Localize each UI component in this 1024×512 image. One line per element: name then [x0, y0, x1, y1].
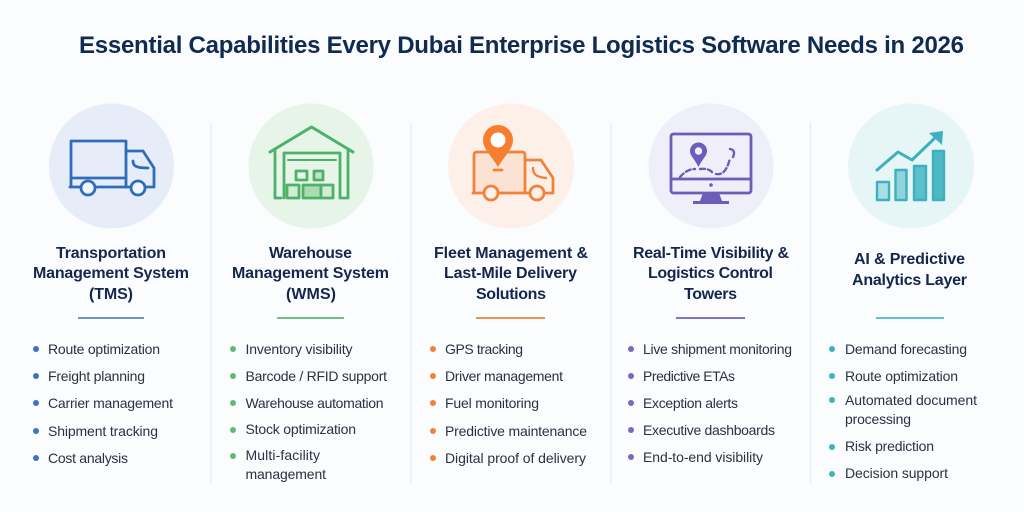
heading: Fleet Management & — [434, 245, 588, 262]
bullet list: GPS tracking — [445, 341, 523, 357]
heading — [633, 245, 789, 303]
bullet list: Warehouse automation — [246, 395, 384, 411]
bullet list: Exception alerts — [643, 395, 738, 411]
bullet list: Freight planning — [48, 368, 145, 384]
heading — [852, 251, 967, 289]
bullet list: Demand forecasting — [845, 341, 967, 357]
location pin — [483, 125, 513, 167]
bullet list — [829, 341, 977, 481]
bullet list: Barcode / RFID support — [246, 368, 387, 384]
heading — [232, 245, 389, 303]
heading: Towers — [684, 286, 737, 303]
bullet list: management — [246, 466, 326, 482]
bullet list: Digital proof of delivery — [445, 450, 586, 466]
heading: Management System — [33, 265, 189, 282]
icon: truck with location pin — [448, 104, 574, 228]
bullet list: Decision support — [845, 465, 948, 481]
heading underline — [476, 317, 545, 319]
bullet list: Risk prediction — [845, 438, 934, 454]
heading — [33, 245, 189, 303]
heading: (WMS) — [286, 286, 336, 303]
bullet list: Executive dashboards — [643, 422, 775, 438]
icon: growth bar chart — [848, 104, 974, 228]
bullet list — [628, 341, 792, 465]
bullet list: Inventory visibility — [246, 341, 352, 357]
bullet list: End-to-end visibility — [643, 449, 763, 465]
bullet list: Automated document — [845, 392, 977, 408]
bullet list: Predictive ETAs — [643, 368, 735, 384]
heading underline — [876, 317, 944, 319]
bullet list: Stock optimization — [246, 421, 356, 437]
heading — [434, 245, 588, 303]
panel: WMS — [230, 104, 389, 482]
bullet list: Carrier management — [48, 395, 173, 411]
icon: delivery truck — [49, 104, 174, 228]
bullet list: Route optimization — [48, 341, 160, 357]
heading underline — [676, 317, 745, 319]
title: Essential Capabilities Every Dubai Enterprise Logistics Software Needs in 2026 — [79, 32, 964, 59]
bullet list: Driver management — [445, 368, 563, 384]
bullet list: Fuel monitoring — [445, 395, 539, 411]
heading underline — [78, 317, 144, 319]
panel: Fleet Management — [430, 104, 588, 466]
bullet list: Shipment tracking — [48, 423, 158, 439]
heading: (TMS) — [89, 286, 133, 303]
icon: monitor with route map — [648, 104, 774, 228]
bullet list: Live shipment monitoring — [643, 341, 792, 357]
panel: Real-Time Visibility — [628, 104, 792, 465]
bullet list — [33, 341, 173, 466]
heading: Last-Mile Delivery — [444, 265, 577, 282]
heading: AI & Predictive — [854, 251, 965, 268]
heading: Transportation — [56, 245, 166, 262]
icon: warehouse — [248, 104, 374, 228]
heading: Solutions — [476, 286, 546, 303]
bullet list: Predictive maintenance — [445, 423, 587, 439]
bullet list: Cost analysis — [48, 450, 128, 466]
bullet list — [230, 341, 387, 482]
panel: AI and Predictive Analytics — [829, 104, 977, 481]
bullet list — [430, 341, 587, 466]
heading: Management System — [232, 265, 389, 282]
heading: Logistics Control — [648, 265, 773, 282]
bullet list: Route optimization — [845, 368, 958, 384]
heading: Analytics Layer — [852, 272, 967, 289]
heading: Warehouse — [269, 245, 352, 262]
bullet list: Multi-facility — [246, 447, 320, 463]
heading underline — [277, 317, 344, 319]
panel: TMS — [33, 104, 189, 466]
heading: Real-Time Visibility & — [633, 245, 789, 262]
bullet list: processing — [845, 411, 911, 427]
